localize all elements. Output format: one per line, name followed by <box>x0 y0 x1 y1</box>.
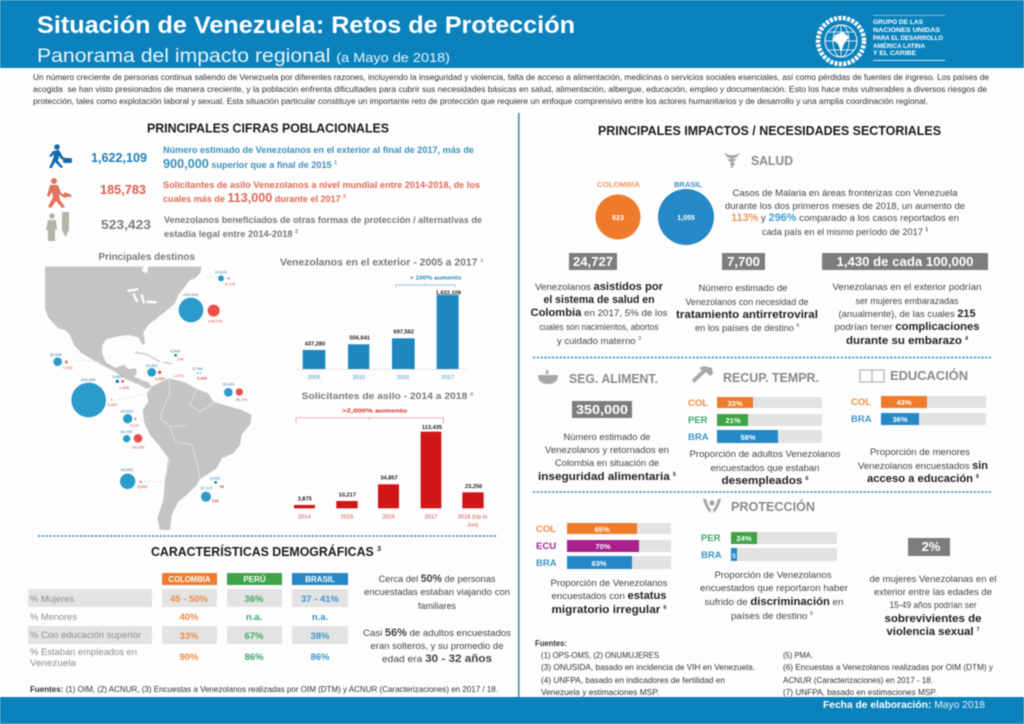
intro text <box>33 72 989 106</box>
bar values: 23,256 <box>465 484 482 490</box>
callout: 7,700: tratamiento antirretroviral <box>676 309 818 321</box>
year labels: 2016 <box>382 515 395 521</box>
text: viajando con familiares: familiares <box>418 601 456 612</box>
bubble: Canada: 19,823 <box>215 270 228 275</box>
bar chart: discriminación: 5 <box>732 554 736 560</box>
header banner <box>0 0 1024 68</box>
text: violencia sexual: exterior entre las edades de <box>874 587 992 598</box>
text: malaria: durante los dos primeros meses de 2018, un aumento de <box>725 201 965 212</box>
logo text: NACIONES UNIDAS <box>873 27 940 34</box>
text: estatus migratorio <box>550 578 668 616</box>
text: desempleados <box>690 449 841 487</box>
bar chart: estatus migratorio <box>536 523 671 569</box>
bar values <box>298 425 482 502</box>
text: asilo: Solicitantes de asilo Venezolanos a nivel mundial entre 2014-2018, de los <box>163 180 480 190</box>
text: sin acceso: 6 <box>976 474 979 480</box>
text: seguridad alimentaria: Colombia en situación de <box>555 458 659 469</box>
heading: seg aliment: SEG. ALIMENT. <box>569 371 658 386</box>
bubble: Panama <box>112 374 130 390</box>
text: malaria: cada país en el mismo período de 2017 <box>762 227 931 238</box>
text: asilo: 2 <box>343 194 346 200</box>
logo text: GRUPO DE LAS <box>873 19 923 26</box>
section: seguridad alimentaria: 350,000 <box>576 402 628 417</box>
text: discriminación: sufrido de discriminación en <box>704 596 844 608</box>
bubble: Chile: 84,500 <box>121 467 134 472</box>
increase annotation <box>396 275 462 288</box>
intro text: Un número creciente de personas continua saliendo de Venezuela por diferentes razones, incluyendo la inseguridad y violencia, falta de acceso a alimentación, medicinas o servicios sociales esenciales, así como pérdidas de fuentes de ingreso. Los países de <box>33 72 989 82</box>
bar chart: desempleados: BRA <box>688 432 709 443</box>
Perú column: 36% <box>244 594 264 605</box>
text: malaria: 113% y 296% comparado a los casos reportados en <box>731 212 959 224</box>
callout: 2%: 2% <box>922 539 941 554</box>
Perú column: 67% <box>244 631 264 642</box>
year labels: 2005 <box>308 375 320 381</box>
bubble: Ecuador <box>121 409 140 427</box>
Brasil column: 37 - 41% <box>301 594 340 605</box>
callout: 1,430 <box>822 253 988 347</box>
bar values: 10,217 <box>339 492 356 498</box>
Colombia column: 90% <box>179 652 199 663</box>
bubble: Argentina and Uruguay: 57,127 <box>201 486 214 491</box>
callout: 350,000 <box>572 401 632 418</box>
increase annotation: + 100% aumento <box>410 275 462 281</box>
bar chart: discriminación: 24% <box>736 534 752 543</box>
bubble: Ecuador: 4,111 <box>130 422 140 427</box>
stat: 523,423: 523,423 <box>101 217 151 232</box>
callout: 7,700: Venezolanos con necesidad de <box>686 297 808 308</box>
callout: 1,430: 4 <box>965 336 968 342</box>
text: otras formas: Venezolanos beneficiados de otras formas de protección / alternativas de <box>164 215 482 225</box>
text: discriminación: países de destino <box>731 611 806 622</box>
text: asilo: cuales más de 113,000 durante el 2017 <box>163 191 340 205</box>
bar values: 556,641 <box>349 336 370 342</box>
bubble: Trinidad <box>170 348 184 378</box>
bar chart: desempleados: COL <box>688 398 708 409</box>
table headers: PERÚ <box>243 575 266 584</box>
heading: impactos: PRINCIPALES IMPACTOS / NECESIDADES SECTORIALES <box>598 124 941 138</box>
callout: 7,700: en los países de destino <box>695 323 798 334</box>
date of elaboration: Fecha de elaboración: Mayo 2018 <box>823 699 985 711</box>
bar chart: discriminación <box>701 532 837 561</box>
chart title: Solicitantes de asilo - 2014 a 2018 <box>302 391 446 401</box>
text: estatus migratorio: Proporción de Venezolanos <box>550 578 668 589</box>
text: discriminación: Proporción de Venezolanos <box>714 570 832 581</box>
text: otras formas: 2 <box>295 229 298 235</box>
bubble: Guyana: 5,764 <box>193 366 203 371</box>
map connector lines <box>75 277 220 482</box>
bar values: 3,875 <box>298 496 312 502</box>
increase annotation <box>296 409 443 423</box>
bar chart: estatus migratorio: 63% <box>591 559 607 568</box>
callout: 1,430: durante su embarazo <box>846 335 957 347</box>
text: solteros <box>363 627 511 665</box>
text: solteros: Casi 56% de adultos encuestados <box>363 627 511 639</box>
icon: hammer <box>692 366 713 383</box>
Colombia column <box>170 594 209 663</box>
bar chart: sin acceso: COL <box>851 397 871 408</box>
bubble: Panama: 1,905 <box>119 385 130 390</box>
text: malaria <box>725 188 965 238</box>
callout: 24,727: cuales son nacimientos, abortos <box>540 322 659 333</box>
bar chart: desempleados <box>688 397 822 443</box>
text: seguridad alimentaria: Número estimado de <box>564 432 650 443</box>
bar chart: estatus migratorio: ECU <box>536 541 556 552</box>
map detail: lakes <box>127 289 157 303</box>
sources right: (7) UNFPA, basado en estimaciones MSP. <box>783 688 937 697</box>
bubble: Trinidad: 145 <box>177 357 184 362</box>
callout: 24,727 <box>530 253 668 347</box>
text: otras formas <box>164 215 482 239</box>
bubble: United States: 145,276 <box>208 319 223 324</box>
panel: map principales destinos <box>45 252 252 530</box>
bar chart: sin acceso <box>851 396 986 425</box>
callout: 24,727: el sistema de salud en <box>544 294 655 306</box>
year labels: 2014 <box>298 515 311 521</box>
logo text <box>873 15 945 61</box>
bubble: Brasil malaria <box>658 180 714 245</box>
callout: 7,700: 7,700 <box>727 254 760 269</box>
sources left: Fuentes: (1) OIM, (2) ACNUR, (3) Encuestas a Venezolanos realizadas por OIM (DTM) y ACNUR (Caracterizaciones) en 2017 / 18. <box>30 685 498 694</box>
text: exterior: Número estimado de Venezolanos en el exterior al final de 2017, más de <box>163 145 474 155</box>
year labels <box>298 515 487 529</box>
table headers: BRASIL <box>305 575 335 584</box>
text: estatus migratorio: 6 <box>664 605 667 611</box>
heading: demográficas: 3 <box>377 546 381 553</box>
logo text: AMÉRICA LATINA <box>873 42 926 50</box>
text: desempleados: encuestados que estaban <box>710 463 820 474</box>
chart: venezolanos en el exterior <box>280 257 484 381</box>
text: estatus migratorio: migratorio irregular <box>552 604 654 616</box>
year labels: 2017 <box>441 375 454 381</box>
bar chart: sin acceso: 43% <box>896 398 912 407</box>
Brasil column: n.a. <box>312 612 328 623</box>
Brasil column <box>301 594 340 663</box>
bubble: Brasil: 35,000 <box>222 382 235 387</box>
row labels: % Estaban empleados en <box>30 647 137 657</box>
text: desempleados: 6 <box>806 476 809 482</box>
bubble: Brasil malaria: 1,055 <box>677 215 695 222</box>
bubble: Colombia malaria <box>596 180 641 240</box>
icon: person walking red <box>47 178 72 208</box>
Brasil column: 86% <box>310 652 330 663</box>
bubble: Canada: 5,775 <box>225 282 236 287</box>
Colombia column: 40% <box>179 612 199 623</box>
bar values: 697,562 <box>393 330 414 336</box>
heading: educación: EDUCACIÓN <box>890 368 968 383</box>
text: discriminación: 6 <box>810 611 813 617</box>
bubble: Peru: 33,152 <box>132 444 145 449</box>
sources right: (6) Encuestas a Venezolanos realizadas por OIM (DTM) y <box>783 663 994 672</box>
increase annotation: >2,000% aumento <box>342 409 408 415</box>
heading: protección: PROTECCIÓN <box>731 499 815 514</box>
bar chart: desempleados: 33% <box>727 399 743 408</box>
intro text: protección, tales como explotación laboral y sexual. Esta situación particular constituye un importante reto de protección que requiere un enfoque comprensivo entre los actores humanitarios y de desarrollo y una amplia coordinación regional. <box>33 96 928 106</box>
callout: 1,430: (anualmente), de las cuales 215 <box>838 308 975 320</box>
text: exterior: 900,000 superior que a final de 2015 <box>163 157 330 171</box>
text: otras formas: estadía legal entre 2014-2018 <box>164 229 291 239</box>
bubble: Trinidad: 1,274 <box>173 373 184 378</box>
table <box>28 573 348 668</box>
stat: 185,783: 185,783 <box>100 182 146 197</box>
text: malaria: 1 <box>925 227 928 233</box>
icon: hands <box>703 499 721 513</box>
callout: 1,430: Venezolanas en el exterior podrían <box>832 282 982 293</box>
year labels: 2015 <box>341 515 353 521</box>
heading: cifras: PRINCIPALES CIFRAS POBLACIONALES <box>147 122 389 136</box>
chart title: Venezolanos en el exterior - 2005 a 2017 <box>280 257 464 268</box>
intro text: acogida se han visto presionados de manera creciente, y la población enfrenta dificultades para cubrir sus necesidades básicas en salud, alimentación, albergue, educación, empleo y documentación. Esto los hace más vulnerables a diversos riesgos de <box>33 84 987 94</box>
text: sin acceso: Venezolanos encuestados sin <box>858 460 988 472</box>
map shape: south america <box>143 378 252 530</box>
heading: principales destinos: Principales destinos <box>98 252 195 263</box>
bubble: Mexico: 7,018 <box>63 365 73 370</box>
bars <box>303 295 459 369</box>
bubble: Curacao <box>145 363 166 381</box>
text: solteros: eran solteros, y su promedio de <box>370 641 504 652</box>
text: seguridad alimentaria: 5 <box>673 472 676 478</box>
logo text: PARA EL DESARROLLO <box>873 35 943 42</box>
bar values: 1,622,109 <box>436 290 461 296</box>
stat: 1,622,109: 1,622,109 <box>91 150 147 165</box>
text: exterior <box>163 145 474 171</box>
bubble: Peru: 26,239 <box>120 429 133 434</box>
bubble: Colombia malaria: 623 <box>612 215 624 222</box>
icon: caduceus <box>724 153 740 168</box>
callout: 2% <box>908 538 950 556</box>
bar values <box>305 290 461 347</box>
text: violencia sexual: 7 <box>977 627 980 633</box>
bubble: Trinidad: 6,500 <box>170 348 181 353</box>
sources right: Fuentes: <box>535 639 567 648</box>
callout: 24,727: Venezolanos asistidos por <box>535 281 664 293</box>
sources right: (1) OPS-OMS, (2) ONUMUJERES <box>541 651 659 660</box>
heading: recup tempr: RECUP. TEMPR. <box>723 370 819 385</box>
bubble: Colombia: 600,000 <box>81 377 96 382</box>
callout: 1,430: podrían tener complicaciones <box>834 321 980 333</box>
callout: 7,700 <box>676 253 818 334</box>
icon: person walking blue <box>49 144 72 168</box>
bubble: Brasil malaria: BRASIL <box>674 180 702 189</box>
text: sin acceso <box>858 447 988 485</box>
text: seguridad alimentaria <box>538 432 676 483</box>
text: violencia sexual: 15-49 años podrían ser <box>890 600 977 611</box>
sources right <box>535 639 994 697</box>
row bands <box>28 589 348 644</box>
icon: person and document grey <box>46 212 69 241</box>
row labels: Venezuela <box>30 658 76 668</box>
row labels: % Con educación superior <box>30 630 141 640</box>
bubble: Canada <box>215 270 236 287</box>
bubble: Argentina and Uruguay: 78 <box>219 484 225 489</box>
panel: características demográficas <box>28 544 511 694</box>
section: protección <box>536 499 996 638</box>
heading: salud: SALUD <box>751 153 793 168</box>
text: violencia sexual: de mujeres Venezolanas en el <box>870 574 996 585</box>
Perú column: 86% <box>244 652 264 663</box>
text: asilo <box>163 180 480 205</box>
section: recuperación temprana <box>688 366 841 487</box>
chart title: 2 <box>470 392 474 398</box>
bar values: 437,280 <box>305 341 325 347</box>
bar chart: estatus migratorio: BRA <box>536 558 557 569</box>
bubble: Chile <box>120 467 148 489</box>
text: seguridad alimentaria: Venezolanos y retornados en <box>545 445 669 456</box>
bubble: Mexico <box>50 352 73 370</box>
year labels: 2010 <box>353 375 365 381</box>
bubble: Mexico: 35,995 <box>50 352 63 357</box>
sources right: (5) PMA. <box>783 651 813 660</box>
icon: bowl <box>538 369 558 384</box>
bubble: Ecuador: 39,519 <box>121 409 134 414</box>
year labels <box>308 375 454 381</box>
icon: UN emblem <box>818 18 864 64</box>
text: sin acceso: Proporción de menores <box>870 447 970 458</box>
table headers <box>162 573 348 585</box>
bar chart: sin acceso: 36% <box>892 415 908 424</box>
sources right: (3) ONUSIDA, basado en incidencia de VIH en Venezuela. <box>541 663 755 672</box>
chart title: 1 <box>480 258 484 264</box>
map borders <box>160 378 217 478</box>
footer bar <box>0 697 1024 724</box>
text: violencia sexual: violencia sexual <box>886 626 971 638</box>
subtitle: Panorama del impacto regional (a Mayo de 2018) <box>37 46 450 67</box>
bubble: Colombia malaria: COLOMBIA <box>597 180 641 189</box>
text: violencia sexual <box>870 574 996 638</box>
bar chart: estatus migratorio: COL <box>536 524 556 535</box>
bars <box>294 432 484 508</box>
text: solteros: edad era 30 - 32 años <box>382 653 492 665</box>
year labels: 2018 (Up to <box>458 515 487 521</box>
bar chart: discriminación: BRA <box>701 550 722 561</box>
bubble: Curacao: 1,237 <box>155 376 166 381</box>
text: desempleados: desempleados <box>722 475 798 487</box>
Brasil column: 38% <box>310 631 330 642</box>
text: seguridad alimentaria: inseguridad alimentaria <box>538 471 661 483</box>
Perú column: n.a. <box>246 612 262 623</box>
text: viajando con familiares: Cerca del 50% de personas <box>378 573 496 585</box>
bubble: Colombia: 1,957 <box>107 402 118 407</box>
bar chart: desempleados: PER <box>688 415 708 426</box>
text: malaria: Casos de Malaria en áreas fronterizas con Venezuela <box>732 188 958 199</box>
icon: book <box>860 370 884 382</box>
bubble: Argentina and Uruguay: 123 <box>212 498 219 503</box>
heading: demográficas: CARACTERÍSTICAS DEMOGRÁFICAS <box>151 545 377 559</box>
bubble: Brasil <box>222 382 249 402</box>
bubble: United States <box>179 292 223 324</box>
callout: 24,727: 3 <box>638 336 641 342</box>
bubble: Panama: 9,883 <box>112 374 123 379</box>
bar chart: sin acceso: BRA <box>851 414 872 425</box>
text: viajando con familiares: encuestadas estaban viajando con <box>364 587 510 598</box>
bubble: Guyana <box>193 366 208 380</box>
bubble: Peru <box>120 429 145 449</box>
section: educación <box>851 368 988 485</box>
callout: 24,727: Colombia en 2017, 5% de los <box>530 307 668 319</box>
bubble: Guyana: 3,343 <box>197 375 208 380</box>
text: viajando con familiares <box>364 573 510 612</box>
bubble: Brasil: 25,797 <box>236 397 249 402</box>
bubble: Chile: 2,217 <box>138 484 148 489</box>
row labels <box>30 594 141 668</box>
sources right: ACNUR (Caracterizaciones) en 2017 - 18. <box>783 676 933 685</box>
bar values: 34,857 <box>380 475 398 481</box>
text: estatus migratorio: encuestados con estatus <box>552 590 666 602</box>
row labels: % Menores <box>30 612 78 622</box>
bar chart: estatus migratorio: 70% <box>595 542 611 551</box>
callout: 1,430: ser mujeres embarazadas <box>856 296 959 307</box>
year labels: Jun) <box>467 523 478 529</box>
bubble: Colombia <box>71 377 118 417</box>
panel: cifras poblacionales <box>46 122 482 241</box>
year labels: 2017 <box>425 515 437 521</box>
bar chart: discriminación: PER <box>701 533 721 544</box>
text: discriminación <box>700 570 849 622</box>
bubble: Curacao: 20,000 <box>145 363 158 368</box>
callout: 7,700: 4 <box>796 323 799 329</box>
bar chart: desempleados: 21% <box>725 416 741 425</box>
Colombia column: 33% <box>179 631 199 642</box>
section: seguridad alimentaria <box>538 369 676 483</box>
section: salud <box>530 153 988 347</box>
row labels: % Mujeres <box>30 594 75 604</box>
callout: 1,430: 1,430 de cada 100,000 <box>836 254 974 269</box>
bar values: 113,435 <box>422 425 442 431</box>
title: Situación de Venezuela: Retos de Protección <box>37 12 575 39</box>
year labels: 2015 <box>397 375 409 381</box>
text: sin acceso: acceso a educación <box>867 473 971 485</box>
bubble: Argentina and Uruguay <box>201 476 225 503</box>
bubble: United States: ~290,000 <box>182 292 199 297</box>
sources right: Venezuela y estimaciones MSP. <box>541 688 659 697</box>
map shape: north and central america <box>45 267 202 389</box>
text: desempleados: Proporción de adultos Venezolanos <box>690 449 841 460</box>
logo text: Y EL CARIBE <box>873 50 916 57</box>
text: exterior: 1 <box>334 160 337 166</box>
chart: solicitantes de asilo <box>294 391 487 529</box>
Perú column <box>244 594 264 663</box>
Colombia column: 45 - 50% <box>170 594 209 605</box>
bubble: Argentina and Uruguay: 6,033 <box>210 476 221 481</box>
bar chart: estatus migratorio: 65% <box>594 525 610 534</box>
callout: 24,727: y cuidado materno <box>557 336 636 347</box>
text: discriminación: encuestados que reportaron haber <box>700 583 849 594</box>
callout: 7,700: Número estimado de <box>698 283 788 294</box>
table headers: COLOMBIA <box>168 575 211 584</box>
text: violencia sexual: sobrevivientes de <box>884 613 982 625</box>
sources right: (4) UNFPA, basado en indicadores de fertilidad en <box>541 676 725 685</box>
bar chart: desempleados: 58% <box>740 433 756 442</box>
callout: 24,727: 24,727 <box>573 254 613 269</box>
